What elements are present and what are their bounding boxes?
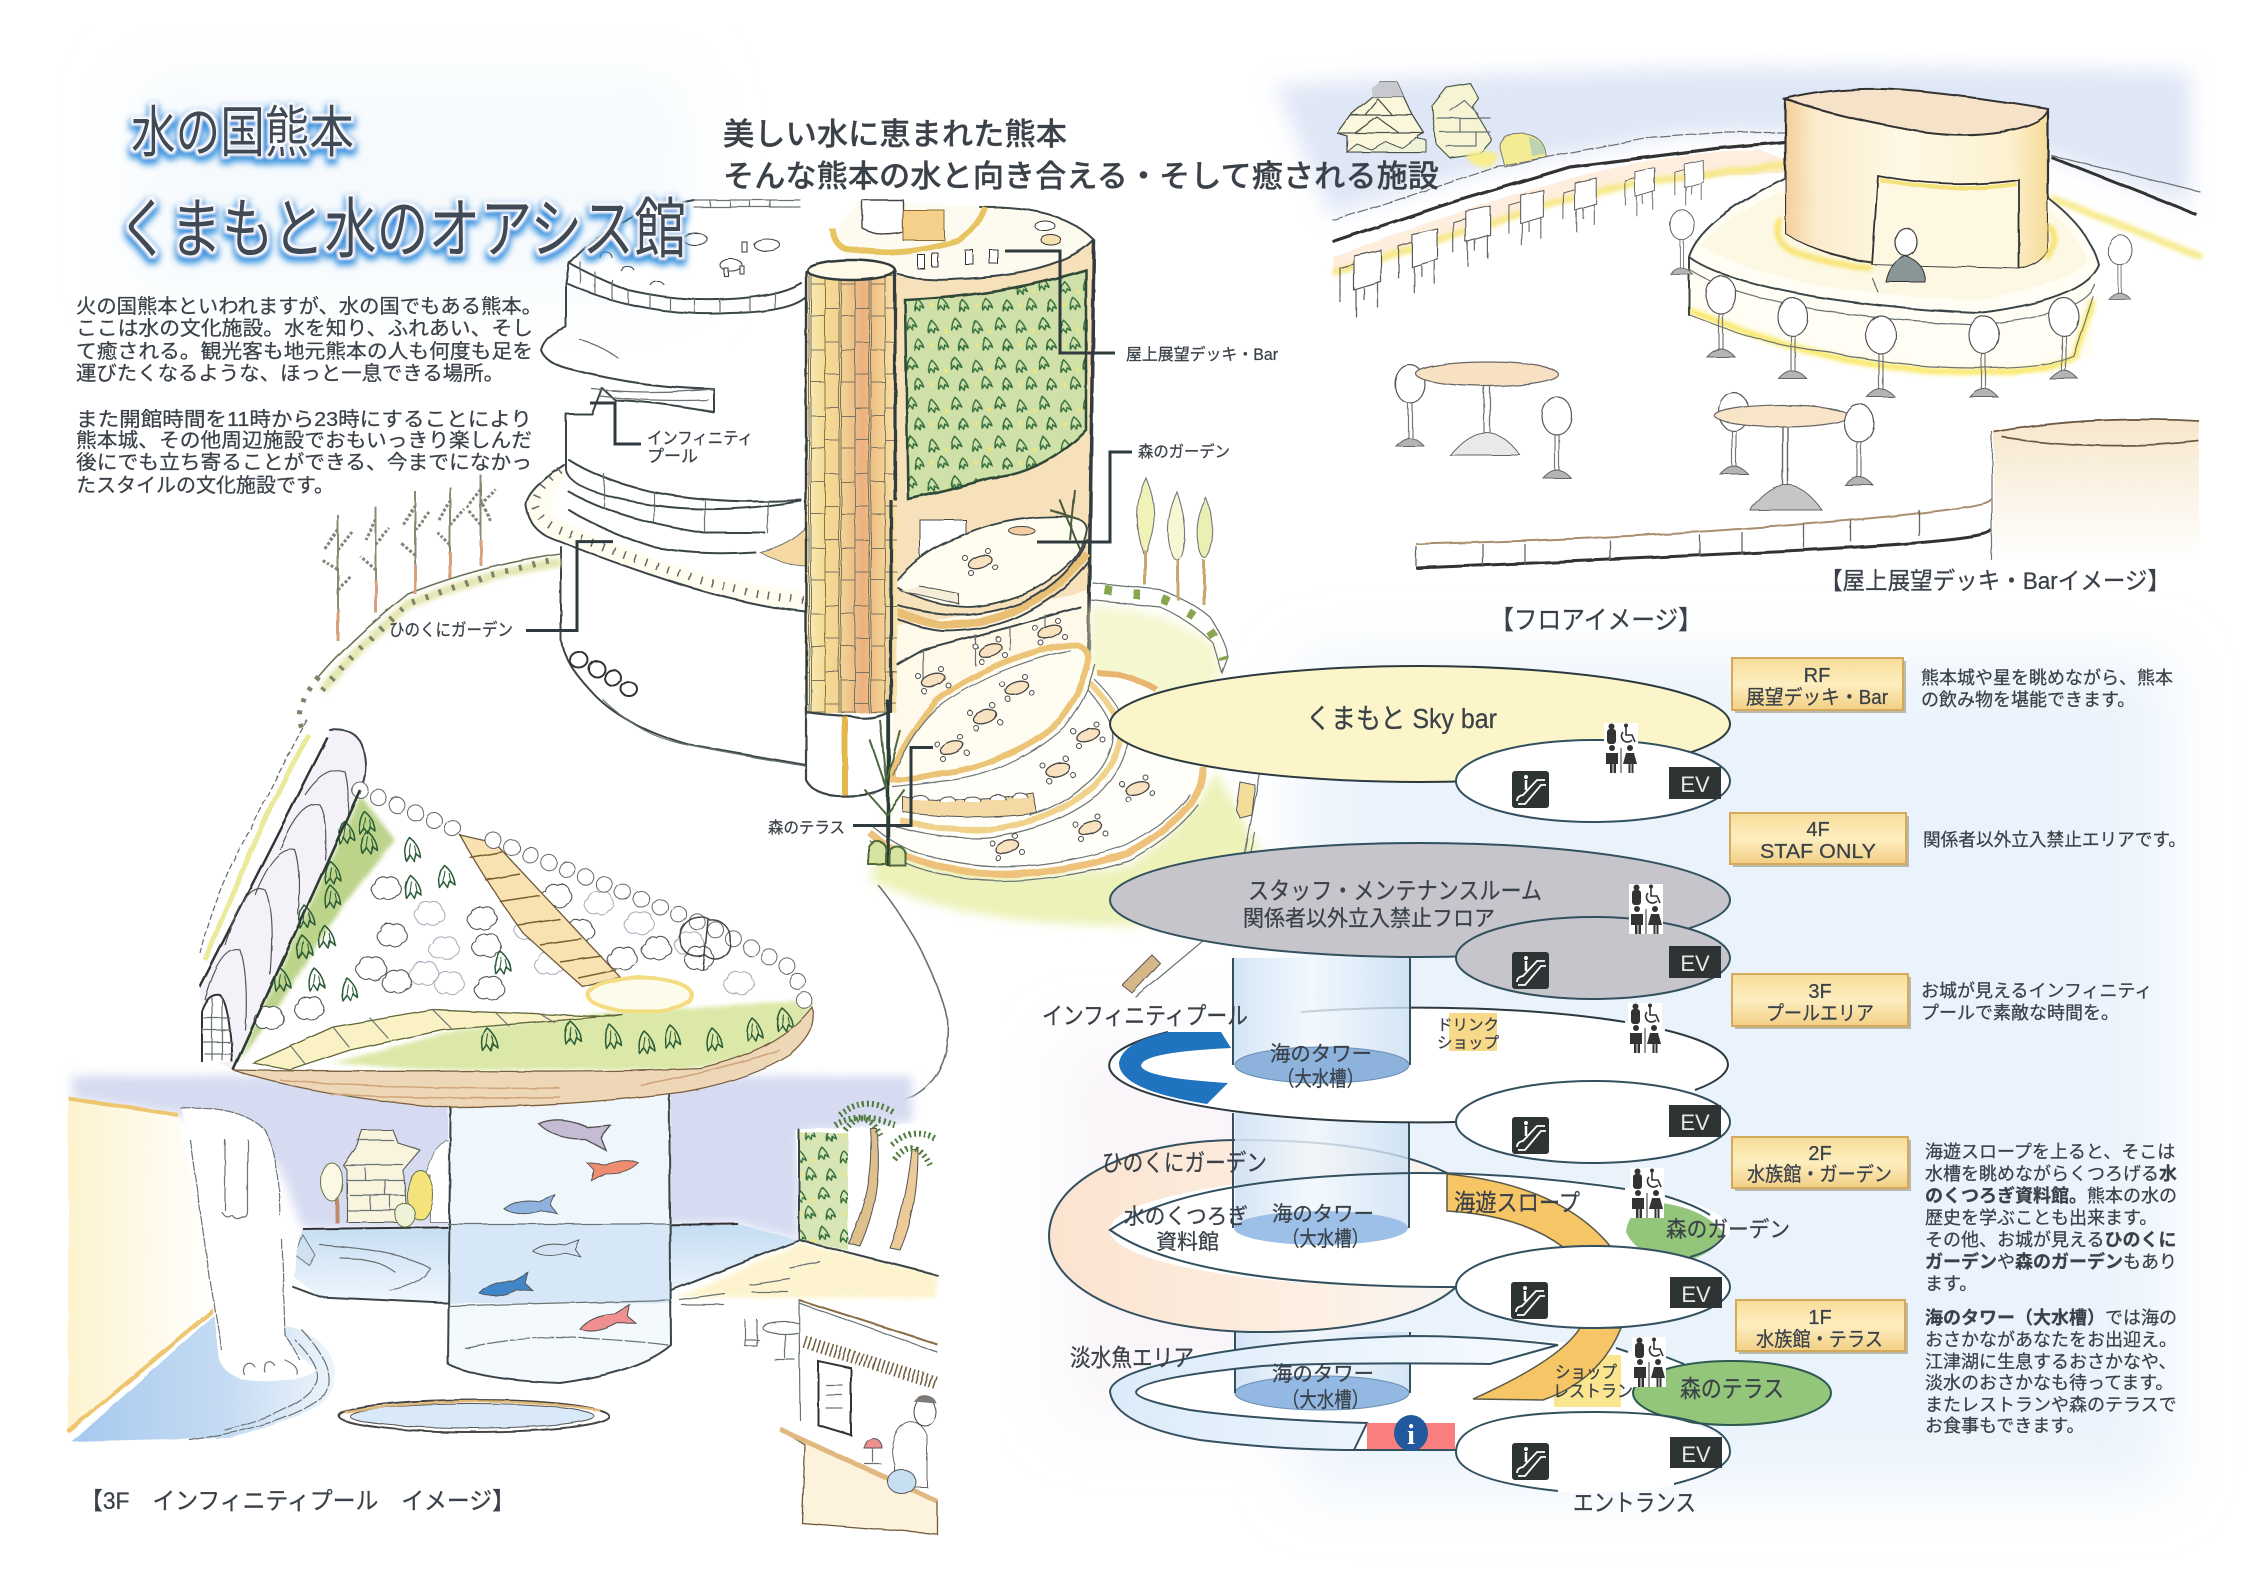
- outer arc: [870, 767, 1203, 874]
- icon: Kumamoto castle: [1337, 82, 1547, 167]
- deck chairs: [1340, 160, 1703, 317]
- callout: hinokuni garden: [389, 542, 613, 640]
- right drum with floors: [830, 200, 1094, 780]
- infinity pool crescent: [1119, 1032, 1231, 1104]
- heading: small title: 水の国熊本: [131, 101, 354, 164]
- EV 3F: EV: [1680, 1110, 1710, 1135]
- floor label: RF: RF: [1804, 665, 1830, 687]
- floor 2F: 森のガーデン: [1666, 1217, 1790, 1242]
- floor 3F: （大水槽）: [1277, 1068, 1364, 1091]
- table and chairs right: [1715, 393, 1874, 510]
- floor 2F: 資料館: [1156, 1231, 1219, 1254]
- floor 2F: [1049, 1113, 1790, 1332]
- intro text: また開館時間を11時から23時にすることにより: [76, 408, 532, 431]
- green wall: [905, 270, 1086, 499]
- floor 2F: 水のくつろぎ: [1124, 1204, 1248, 1229]
- EV 1F: EV: [1681, 1442, 1711, 1467]
- left wing: [541, 200, 867, 566]
- description: RF: 熊本城や星を眺めながら、熊本: [1921, 668, 2173, 688]
- green band bottom: [333, 1000, 812, 1070]
- drink shop: ショップ: [1437, 1034, 1499, 1052]
- deck top: [830, 200, 1094, 280]
- floor 4F: [1110, 843, 1730, 999]
- floor label: 4F: 4F: [1806, 819, 1830, 841]
- sand left: [68, 1098, 220, 1435]
- callout: rooftop deck: [1005, 251, 1278, 364]
- wedge body: [233, 790, 812, 1107]
- floor label: RF: 展望デッキ・Bar: [1746, 686, 1888, 709]
- EV RF: [1669, 767, 1721, 799]
- leaf 2: [893, 645, 1088, 780]
- icon: benches: [1236, 782, 1255, 818]
- terrace deck ring: [526, 465, 806, 765]
- tower 3F: [1233, 958, 1410, 1065]
- garden roof wedge: [200, 720, 814, 1107]
- green wash left: [238, 795, 395, 1062]
- bar core: [1785, 89, 2048, 269]
- description: 2F: 水槽を眺めながらくつろげる水: [1925, 1164, 2177, 1184]
- description: 2F: [1925, 1142, 2177, 1294]
- restroom 1F: [1632, 1337, 1666, 1387]
- callout: infinity pool: [590, 403, 753, 466]
- callout: infinity pool: インフィニティ: [647, 429, 753, 448]
- intro text: [76, 295, 542, 497]
- small lobby 3F: [1456, 1081, 1730, 1163]
- floor 4F: スタッフ・メンテナンスルーム: [1248, 878, 1542, 905]
- faint flowers: [409, 892, 754, 995]
- rooftop bar top: [832, 200, 1061, 269]
- floor 2F: ひのくにガーデン: [1102, 1150, 1267, 1177]
- right wall: [1088, 240, 1094, 680]
- description: 2F: 歴史を学ぶことも出来ます。: [1925, 1208, 2157, 1228]
- description: 1F: おさかながあなたをお出迎え。: [1925, 1330, 2177, 1350]
- lower railing: [1416, 499, 1990, 568]
- description: 1F: 江津湖に生息するおさかなや、: [1925, 1352, 2176, 1372]
- left hedge and trees: [300, 475, 561, 735]
- description: 1F: 海のタワー（大水槽）では海の: [1925, 1308, 2177, 1328]
- brick column: [806, 260, 897, 866]
- table and chairs left: [1395, 362, 1572, 478]
- description: 3F: [1921, 981, 2152, 1023]
- lower right column: [1992, 419, 2199, 560]
- floor label: RF: [1732, 658, 1906, 713]
- EV 3F: [1669, 1105, 1721, 1137]
- drink shop: ドリンク: [1437, 1016, 1499, 1034]
- callout: forest garden: 森のガーデン: [1138, 442, 1230, 461]
- floor RF: [1110, 666, 1730, 822]
- right ground and hedge: [870, 583, 1260, 997]
- tagline: [723, 117, 1439, 194]
- garden curve lines: [603, 700, 948, 1100]
- floor label: 3F: 3F: [1808, 981, 1832, 1003]
- portholes: [570, 652, 637, 696]
- tall trees right: [1137, 478, 1213, 605]
- seats: [903, 793, 1037, 817]
- illustration: building cutaway: [300, 200, 1260, 1100]
- callout: rooftop deck: 屋上展望デッキ・Bar: [1126, 344, 1278, 364]
- bar counter: [1689, 178, 2099, 372]
- tree at terrace: [865, 720, 906, 866]
- floor label: 1F: 1F: [1808, 1307, 1832, 1329]
- path stripe: [253, 1010, 623, 1070]
- floor 1F: ショップ: [1555, 1363, 1617, 1382]
- description: 2F: 海遊スロープを上ると、そこは: [1925, 1142, 2175, 1162]
- small castle: [321, 1130, 480, 1227]
- description: RF: の飲み物を堪能できます。: [1921, 690, 2135, 710]
- slope 1F: [1473, 1328, 1621, 1400]
- bartender: [1872, 228, 1925, 292]
- lake: [72, 1308, 335, 1442]
- floor RF: くまもと Sky bar: [1306, 703, 1497, 734]
- aquarium cylinder: [448, 1070, 671, 1383]
- drink shop: [1437, 1013, 1499, 1052]
- description: 1F: [1925, 1308, 2177, 1436]
- EV 4F: [1669, 946, 1721, 978]
- floor label: 4F: STAF ONLY: [1760, 841, 1876, 863]
- small lobby 1F: [1456, 1411, 1730, 1493]
- description: 3F: プールで素敵な時間を。: [1921, 1003, 2119, 1023]
- tower label 1F: 海のタワー: [1272, 1363, 1374, 1386]
- floor label: 2F: 2F: [1808, 1143, 1832, 1165]
- information desk: i: [1407, 1420, 1415, 1451]
- intro text: 運びたくなるような、ほっと一息できる場所。: [76, 362, 504, 385]
- description: 1F: またレストランや森のテラスで: [1925, 1395, 2177, 1415]
- floor label: 2F: 水族館・ガーデン: [1747, 1163, 1892, 1186]
- heading: main title: くまもと水のオアシス館: [118, 192, 686, 266]
- callout: infinity pool: プール: [647, 447, 698, 466]
- callout: forest terrace: [768, 748, 933, 837]
- intro text: 熊本城、その他周辺施設でおもいっきり楽しんだ: [76, 429, 532, 452]
- label freshwater: 淡水魚エリア: [1070, 1345, 1194, 1372]
- EV 2F: [1670, 1277, 1722, 1308]
- callout: forest garden: [1037, 442, 1230, 542]
- EV RF: EV: [1680, 772, 1710, 797]
- leaves: [275, 811, 793, 1054]
- pool water: [280, 1224, 799, 1306]
- tagline: そんな熊本の水と向き合える・そして癒される施設: [723, 159, 1439, 194]
- small lobby 2F: [1456, 1246, 1730, 1328]
- floor 2F: （大水槽）: [1282, 1228, 1369, 1251]
- tagline: 美しい水に恵まれた熊本: [723, 117, 1067, 152]
- floor label: 1F: [1736, 1300, 1908, 1354]
- description: RF: [1921, 668, 2173, 710]
- forest garden blob: [1626, 1202, 1723, 1260]
- callout: forest terrace: 森のテラス: [768, 819, 845, 837]
- illustration: roof deck and bar: [1275, 68, 2202, 568]
- courtyard tables: [680, 1262, 820, 1360]
- floor 2F: 海のタワー: [1272, 1203, 1374, 1226]
- intro text: 火の国熊本といわれますが、水の国でもある熊本。: [76, 295, 542, 318]
- tunnel shell: [200, 730, 366, 1070]
- EV 1F: [1670, 1437, 1722, 1468]
- description: 1F: 淡水のおさかなも待ってます。: [1925, 1373, 2173, 1393]
- floor 3F: 海のタワー: [1270, 1043, 1372, 1066]
- information desk: [1354, 1415, 1456, 1451]
- wood deck edge: [233, 1007, 814, 1107]
- floor 1F: [1070, 1328, 1831, 1517]
- floor 1F: 森のテラス: [1680, 1376, 1784, 1403]
- description: 1F: お食事もできます。: [1925, 1416, 2084, 1436]
- hedge bumps: [360, 790, 808, 1010]
- sky: [1275, 68, 2190, 215]
- floor 2F: 海遊スロープ: [1454, 1190, 1580, 1217]
- floor 3F: [1042, 958, 1730, 1163]
- rail: [1333, 132, 2202, 273]
- floor 1F: レストラン: [1553, 1382, 1633, 1401]
- floor label: 3F: プールエリア: [1766, 1003, 1874, 1025]
- floor label: 2F: [1732, 1137, 1911, 1191]
- description: 4F: 関係者以外立入禁止エリアです。: [1923, 830, 2186, 850]
- floor label: 4F: [1730, 813, 1909, 867]
- intro text: たスタイルの文化施設です。: [76, 474, 334, 497]
- description: 2F: ます。: [1925, 1274, 1977, 1294]
- flowers: [254, 877, 714, 1030]
- freshwater ring: [1110, 1336, 1558, 1450]
- yellow ground right: [677, 1243, 937, 1298]
- EV 2F: EV: [1681, 1282, 1711, 1307]
- floor diagram: [1042, 666, 1831, 1517]
- garden floor: [920, 520, 966, 583]
- caption: rooftop image: 【屋上展望デッキ・Barイメージ】: [1820, 568, 2170, 595]
- roof tables left: [600, 233, 780, 285]
- intro text: 後にでも立ち寄ることができる、今までになかっ: [76, 451, 532, 474]
- description: 2F: ガーデンや森のガーデンもあり: [1925, 1251, 2177, 1272]
- entrance label: エントランス: [1573, 1490, 1696, 1517]
- floor label: 1F: 水族館・テラス: [1756, 1328, 1883, 1351]
- tree: [680, 917, 731, 970]
- forest terrace ellipse: [1633, 1361, 1831, 1425]
- description: 2F: のくつろぎ資料館。熊本の水の: [1925, 1185, 2177, 1206]
- floor 1F: （大水槽）: [1282, 1389, 1369, 1412]
- sea: [72, 1076, 912, 1240]
- EV 4F: EV: [1680, 951, 1710, 976]
- caption: floor image: 【フロアイメージ】: [1490, 605, 1702, 635]
- floor oval: [1110, 1173, 1730, 1287]
- description: 3F: お城が見えるインフィニティ: [1921, 981, 2152, 1001]
- middle arc: [900, 683, 1121, 830]
- waterfall: [181, 1108, 329, 1440]
- floor 4F: 関係者以外立入禁止フロア: [1243, 906, 1495, 931]
- rail band: [893, 607, 1080, 667]
- floor 3F: インフィニティプール: [1042, 1003, 1248, 1030]
- cafe stand: [781, 1300, 937, 1534]
- stairs: [460, 835, 620, 987]
- intro text: ここは水の文化施設。水を知り、ふれあい、そし: [76, 317, 533, 340]
- description: 2F: その他、お城が見えるひのくに: [1925, 1230, 2176, 1250]
- callout: hinokuni garden: ひのくにガーデン: [389, 620, 513, 640]
- shop box: [1554, 1355, 1621, 1407]
- palm wall: [796, 1104, 937, 1275]
- illustration: 3F infinity pool scene: [68, 720, 937, 1534]
- caption: 3F image: 【3F インフィニティプール イメージ】: [80, 1488, 515, 1515]
- floor label: 3F: [1732, 974, 1911, 1029]
- intro text: て癒される。観光客も地元熊本の人も何度も足を: [76, 340, 533, 363]
- lower floor decks: [870, 645, 1255, 993]
- sea slope: [1447, 1174, 1611, 1247]
- oval pond: [339, 1400, 609, 1432]
- bar stools: [1670, 210, 2132, 397]
- hinokuni garden crescent: [1049, 1140, 1456, 1332]
